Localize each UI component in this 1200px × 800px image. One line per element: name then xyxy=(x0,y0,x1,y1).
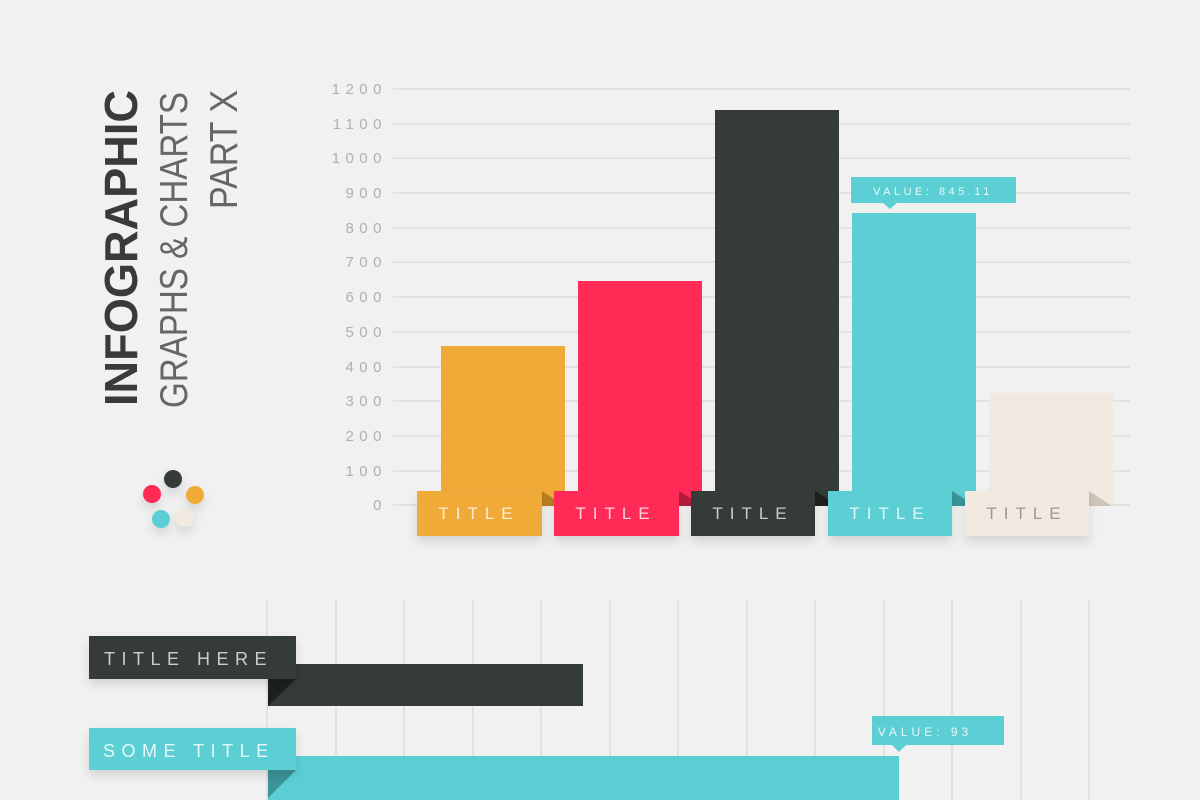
y axis labels: 500 xyxy=(345,324,387,341)
title block: GRAPHS & CHARTS xyxy=(153,92,196,408)
bar: dark: TITLE xyxy=(712,504,794,523)
y axis labels: 900 xyxy=(345,185,387,202)
y axis labels: 400 xyxy=(345,359,387,376)
bar: orange: TITLE xyxy=(438,504,520,523)
title block: INFOGRAPHIC xyxy=(95,90,147,406)
y axis labels xyxy=(332,81,387,514)
horizontal bar: some title: SOME TITLE xyxy=(103,741,275,761)
callout: value 93: VALUE: 93 xyxy=(878,725,972,739)
y axis labels: 600 xyxy=(345,289,387,306)
horizontal bar: some title xyxy=(89,728,899,800)
horizontal bar: title here: TITLE HERE xyxy=(104,649,273,669)
grid lines xyxy=(393,89,1130,505)
y axis labels: 200 xyxy=(345,428,387,445)
bar: red xyxy=(554,281,702,536)
y axis labels: 1100 xyxy=(333,116,387,133)
bar: orange xyxy=(417,346,565,536)
bar: teal xyxy=(828,213,976,536)
bar: beige: TITLE xyxy=(986,504,1068,523)
title block xyxy=(95,90,246,408)
y axis labels: 1000 xyxy=(332,150,387,167)
bar: teal: TITLE xyxy=(849,504,931,523)
y axis labels: 300 xyxy=(345,393,387,410)
y axis labels: 800 xyxy=(345,220,387,237)
bar: beige xyxy=(965,393,1113,536)
horizontal bar: title here xyxy=(89,636,583,706)
bar: red: TITLE xyxy=(575,504,657,523)
title block: PART X xyxy=(203,90,246,209)
y axis labels: 1200 xyxy=(332,81,387,98)
bottom grid xyxy=(267,600,1089,800)
icon: color dots xyxy=(143,470,204,528)
y axis labels: 700 xyxy=(345,254,387,271)
callout: value 93 xyxy=(872,716,1004,752)
callout: value 845.11: VALUE: 845.11 xyxy=(873,186,993,198)
bar: dark xyxy=(691,110,839,536)
y axis labels: 100 xyxy=(345,463,387,480)
callout: value 845.11 xyxy=(851,177,1016,209)
y axis labels: 0 xyxy=(373,497,387,514)
